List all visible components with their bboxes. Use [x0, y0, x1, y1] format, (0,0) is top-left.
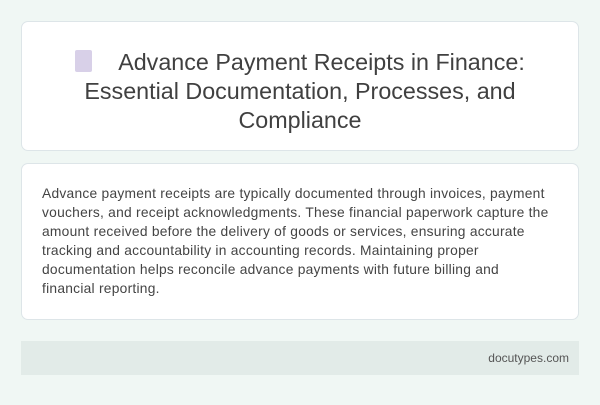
panel: title	[21, 21, 579, 151]
text block: Advance payment receipts are typically documented through invoices, payment vouchers, and receipt acknowledgments. These financial paperwork capture the amount received before the delivery of goods or services, ensuring accurate tracking and accountability in accounting records. Maintaining proper documentation helps reconcile advance payments with future billing and financial reporting.	[42, 186, 549, 296]
panel: description	[21, 163, 579, 320]
title: Advance Payment Receipts in Finance: Essential Documentation, Processes, and Compliance	[84, 49, 525, 133]
icon: receipt	[75, 50, 92, 72]
footer text: docutypes.com	[488, 351, 569, 365]
footer	[21, 341, 579, 375]
